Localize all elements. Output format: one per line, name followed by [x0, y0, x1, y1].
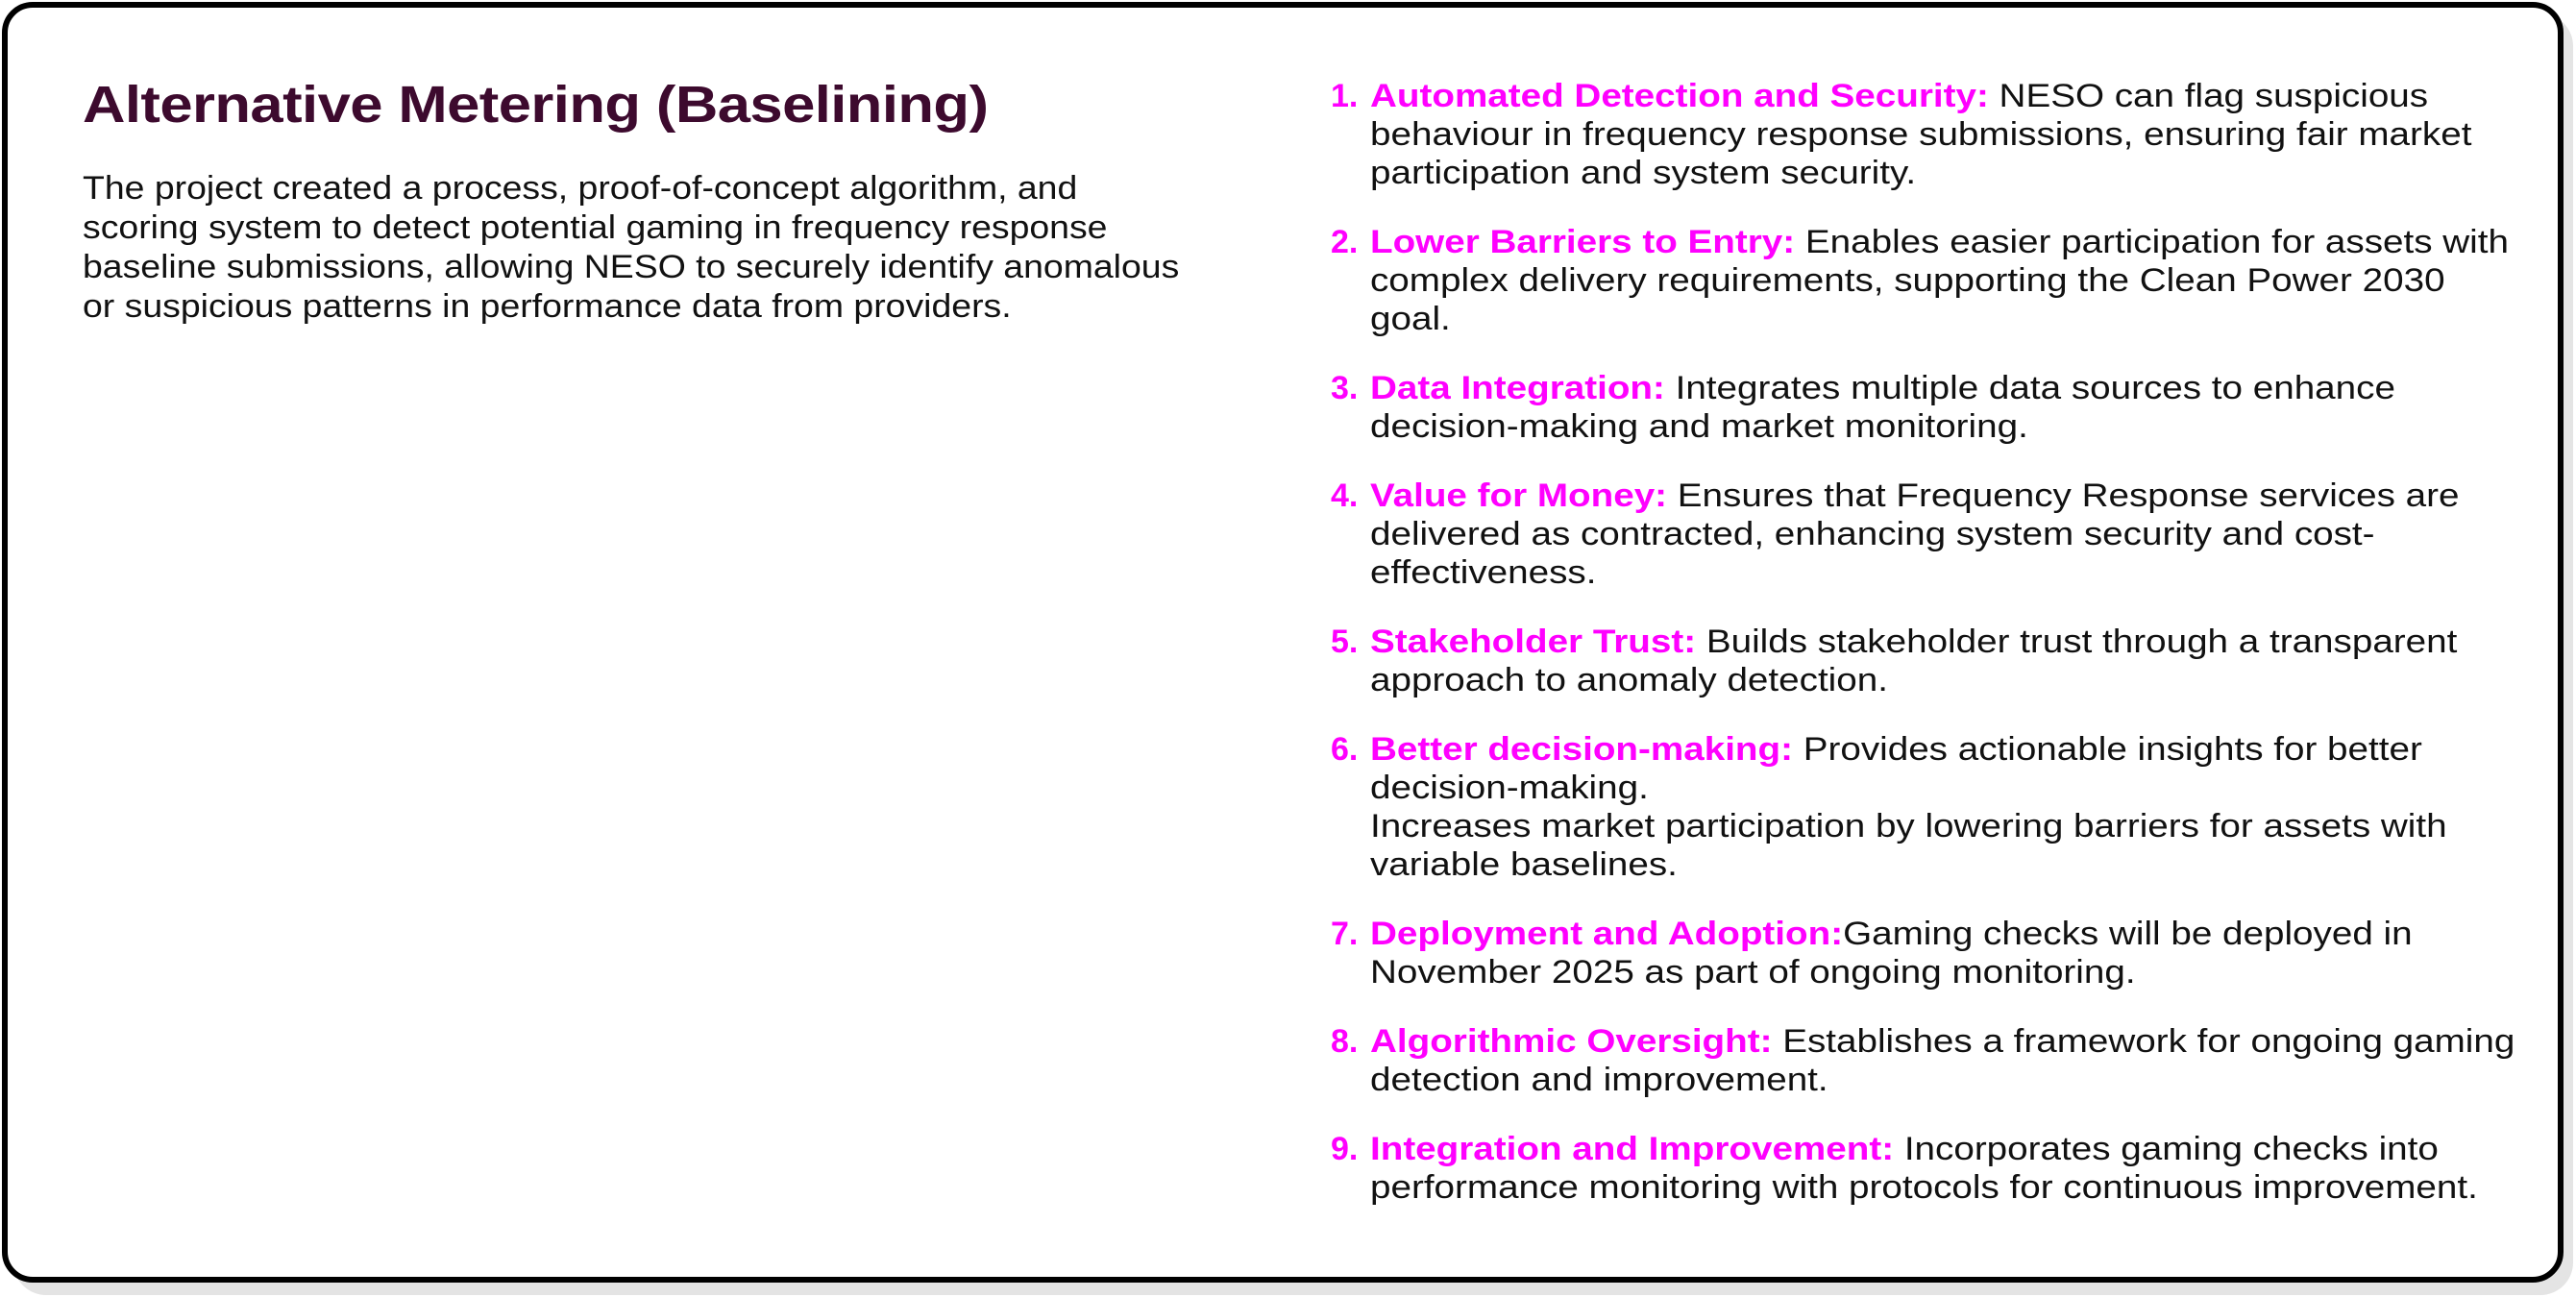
list item 1: behaviour in frequency response submissions, ensuring fair market	[1370, 116, 2471, 153]
list item 3: Data Integration: Integrates multiple data sources to enhance	[1370, 370, 2395, 406]
list item 1	[1331, 78, 2471, 191]
list item 6	[1331, 731, 2447, 883]
list item 4: Value for Money: Ensures that Frequency Response services are	[1370, 477, 2459, 514]
list item 1: Automated Detection and Security: NESO can flag suspicious	[1370, 78, 2428, 114]
list item 7	[1331, 916, 2413, 991]
list item 4: effectiveness.	[1370, 554, 1596, 591]
list item 6: variable baselines.	[1370, 846, 1678, 883]
list item 3: 3.	[1331, 370, 1358, 406]
list item 4	[1331, 477, 2459, 591]
description text	[83, 170, 1179, 325]
list item 1: 1.	[1331, 78, 1358, 114]
list item 1: participation and system security.	[1370, 155, 1916, 191]
description text: The project created a process, proof-of-concept algorithm, and	[83, 170, 1077, 207]
list item 7: November 2025 as part of ongoing monitoring.	[1370, 954, 2136, 991]
list item 4: 4.	[1331, 477, 1358, 514]
list item 6: Better decision-making: Provides actionable insights for better	[1370, 731, 2422, 768]
list item 7: Deployment and Adoption:Gaming checks will be deployed in	[1370, 916, 2413, 952]
list item 2: goal.	[1370, 301, 1451, 337]
list item 5: Stakeholder Trust: Builds stakeholder trust through a transparent	[1370, 624, 2457, 660]
list item 5: approach to anomaly detection.	[1370, 662, 1888, 698]
list item 2: complex delivery requirements, supporting the Clean Power 2030	[1370, 262, 2445, 299]
list item 8	[1331, 1023, 2515, 1098]
list item 3: decision-making and market monitoring.	[1370, 408, 2028, 445]
list item 8: detection and improvement.	[1370, 1062, 1828, 1098]
title: Alternative Metering (Baselining)	[83, 76, 988, 134]
list item 2: Lower Barriers to Entry: Enables easier participation for assets with	[1370, 224, 2509, 260]
list item 7: 7.	[1331, 916, 1358, 952]
list item 3	[1331, 370, 2395, 445]
list item 6: Increases market participation by lowering barriers for assets with	[1370, 808, 2447, 844]
description text: or suspicious patterns in performance data from providers.	[83, 288, 1012, 325]
list item 8: Algorithmic Oversight: Establishes a framework for ongoing gaming	[1370, 1023, 2515, 1060]
list item 6: 6.	[1331, 731, 1358, 768]
list item 9: Integration and Improvement: Incorporates gaming checks into	[1370, 1131, 2439, 1167]
list item 6: decision-making.	[1370, 770, 1649, 806]
list item 5	[1331, 624, 2458, 698]
list item 9	[1331, 1131, 2478, 1206]
list item 4: delivered as contracted, enhancing system security and cost-	[1370, 516, 2375, 552]
description text: scoring system to detect potential gaming in frequency response	[83, 209, 1107, 246]
list item 2: 2.	[1331, 224, 1358, 260]
description text: baseline submissions, allowing NESO to securely identify anomalous	[83, 249, 1179, 285]
list item 2	[1331, 224, 2509, 337]
list item 9: 9.	[1331, 1131, 1358, 1167]
list item 8: 8.	[1331, 1023, 1358, 1060]
list item 9: performance monitoring with protocols for continuous improvement.	[1370, 1169, 2478, 1206]
list item 5: 5.	[1331, 624, 1358, 660]
